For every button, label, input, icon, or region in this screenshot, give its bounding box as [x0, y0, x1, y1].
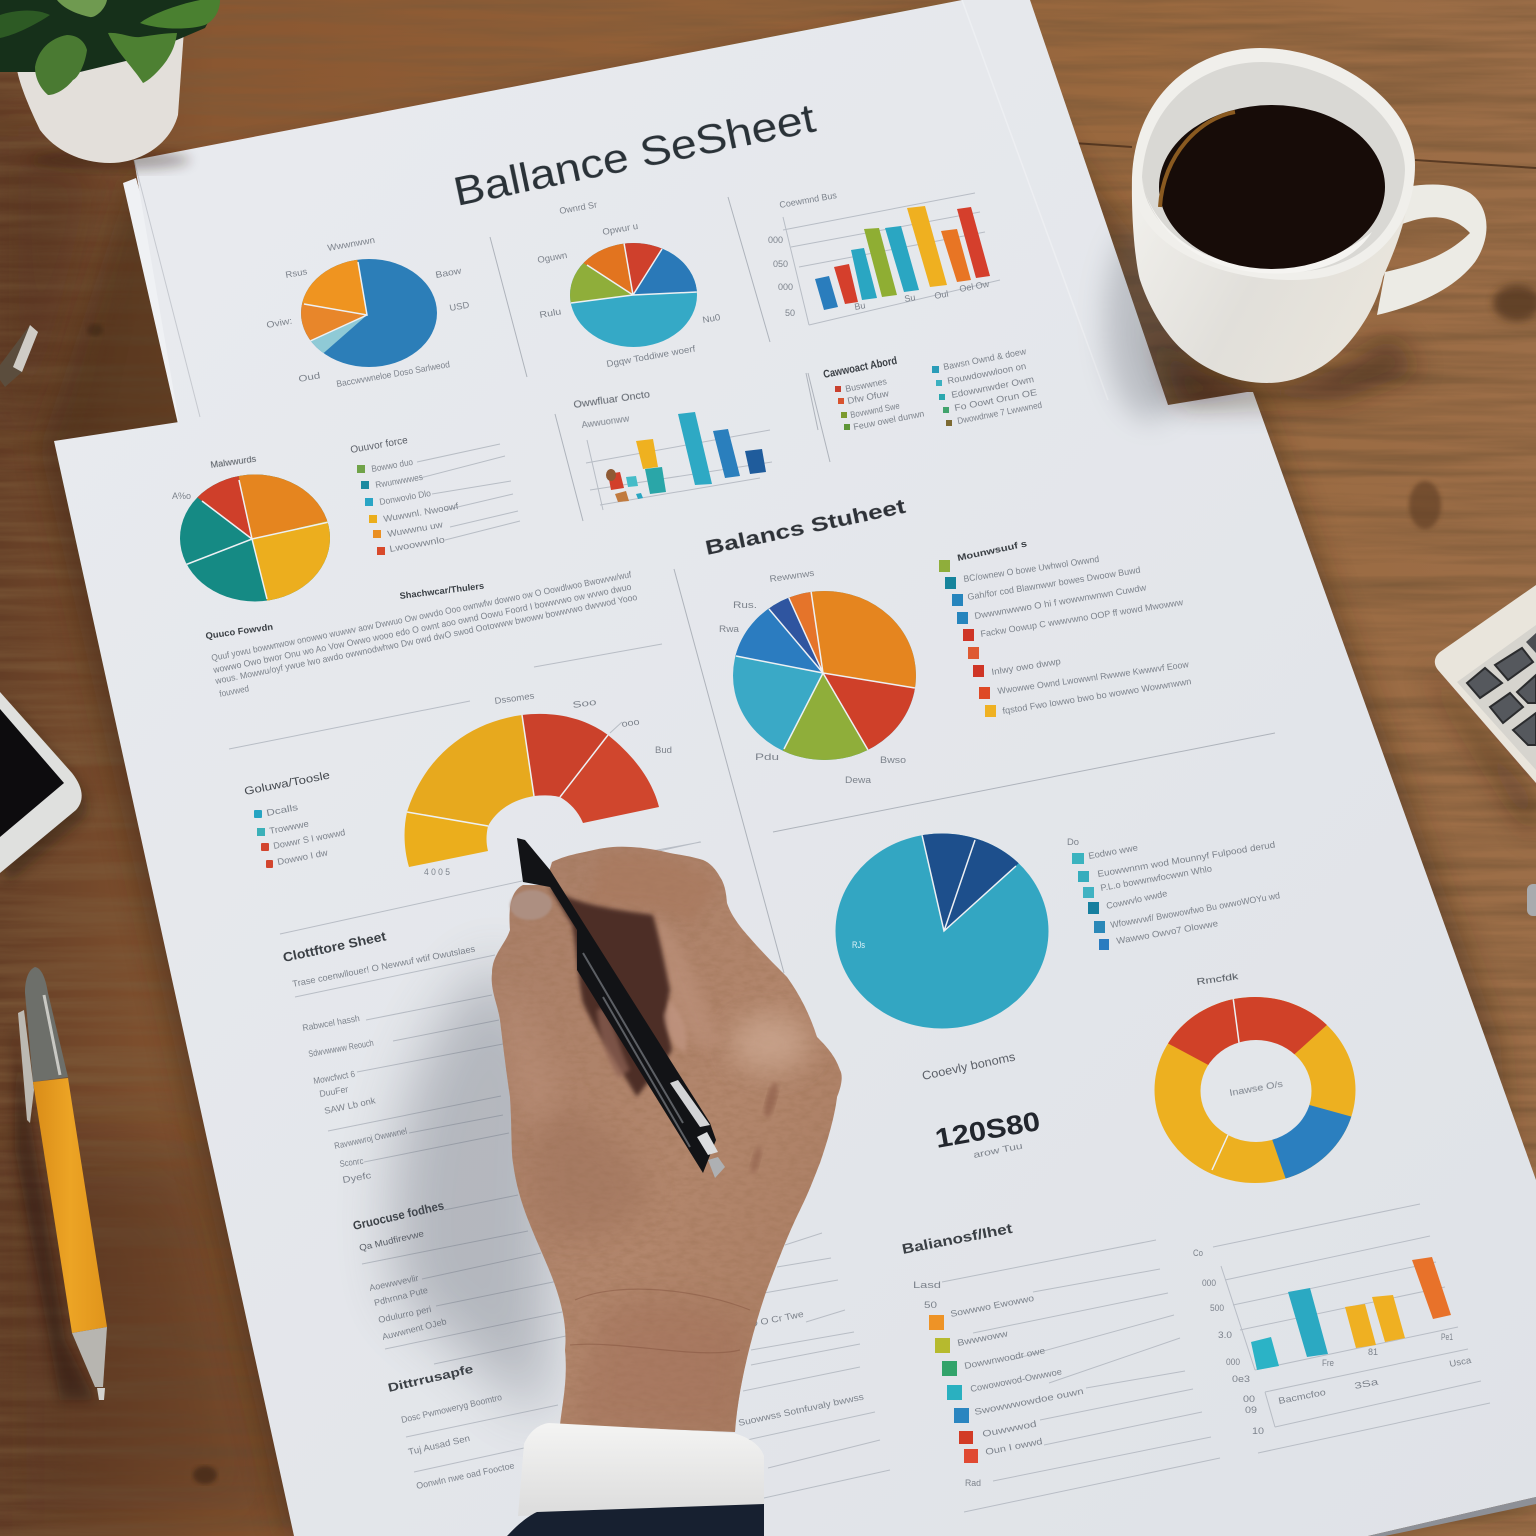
text block: paragraph: wous. Mowwu/oyf ywue lwo awdo owwnodwhwo Dw owd dwO swod Ootowww bwoww bowwvwo dwvwod Yooo	[213, 592, 638, 686]
form section: left column: DuuFer	[319, 1084, 349, 1099]
donut chart	[1154, 973, 1356, 1183]
legend: front centre pie	[939, 538, 1192, 717]
back legend: Cashflow block: Rouwdowwloon on	[946, 361, 1027, 386]
lower legend: Balances block: Rad	[965, 1478, 981, 1488]
legend: large teal pie	[1067, 837, 1281, 950]
legend: front left pie: Bowwo duo	[371, 457, 414, 474]
small silver object at right edge	[1527, 884, 1536, 916]
legend: front centre pie: Gah/for cod Blawnwwr bowes Dwoow Buwd	[967, 565, 1141, 602]
bar chart: back right: Su	[904, 292, 916, 304]
silver pen top left	[0, 325, 38, 387]
legend: front centre pie: fqstod Fwo lowwo bwo bo wowwo Wowwnwwn	[1002, 676, 1192, 716]
gauge chart: ooo	[621, 717, 640, 729]
callout: big number: arow Tuu	[972, 1141, 1023, 1160]
legend: front left pie: Wuwwnl. Nwoowf	[383, 501, 460, 524]
bar chart: bottom right: 3Sa	[1353, 1377, 1379, 1391]
legend: front left pie: Wuwwnu uw	[387, 519, 444, 539]
bar chart: front top centre	[573, 389, 772, 510]
legend: front left pie: Donwovlo Dlo	[379, 488, 432, 507]
form section: left column: Sconrc	[339, 1156, 364, 1169]
legend: front centre pie: Mounwsuuf s	[956, 538, 1028, 563]
form section: right of hand: Suowwss Sotnfuvaly bwwss	[737, 1391, 865, 1428]
callout: big number: Cooevly bonoms	[921, 1049, 1017, 1083]
bar chart: bottom right: Bacmcfoo	[1277, 1387, 1326, 1406]
lower legend: Balances block: Sowwwo Ewowwo	[949, 1293, 1035, 1319]
legend: large teal pie: Eodwo wwe	[1088, 842, 1139, 861]
bar chart: front top centre: Owwfluar Oncto	[573, 389, 651, 411]
back sheet dividers and captions: USD	[449, 300, 471, 313]
back legend: Cashflow block	[822, 346, 1043, 432]
cup shadow on paper	[1105, 220, 1195, 420]
back sheet dividers and captions: Oguwn	[537, 250, 568, 265]
pie chart: large teal: RJs	[852, 940, 865, 950]
gauge chart: Dssomes	[494, 690, 535, 706]
lower legend: Balances block: Balianosf/Ihet	[901, 1220, 1014, 1257]
form section: right of hand	[737, 1233, 890, 1498]
pie chart: front left	[172, 450, 360, 630]
back legend: Cashflow block: Feuw owel dunwn	[852, 408, 925, 432]
back sheet dividers and captions: Dgqw Toddiwe woerf	[606, 343, 696, 369]
bar chart: bottom right: 500	[1210, 1303, 1224, 1313]
pie chart: front left: A%o	[172, 491, 191, 501]
lower legend: Balances block: Oun I owwd	[984, 1436, 1043, 1457]
back legend: Cashflow block: Cawwoact Abord	[822, 355, 898, 381]
bar chart: bottom right	[1193, 1204, 1490, 1453]
back sheet dividers and captions: Baow	[435, 266, 463, 280]
back sheet dividers and captions: Ownrd Sr	[559, 200, 598, 216]
gauge chart: Bud	[655, 745, 672, 755]
form section: left column: Auwwnent OJeb	[381, 1316, 448, 1342]
legend: front centre pie: Fackw Oowup C wwwvwno OOP ff wowd Mwowww	[980, 597, 1184, 639]
legend: front left pie	[350, 435, 520, 555]
legend: large teal pie: Cowwvlo wwde	[1105, 888, 1168, 911]
bar chart: back right: Oel Ow	[959, 279, 990, 294]
smartphone	[0, 692, 87, 884]
yellow ballpoint pen	[15, 967, 107, 1400]
lower legend: Balances block: Dowwnwoodr owe	[963, 1346, 1046, 1371]
lower legend: Balances block: Cowowowod-Owwwoe	[969, 1366, 1063, 1394]
legend: large teal pie: Euowwnnm wod Mounnyf Fulpood derud	[1097, 839, 1276, 879]
pie chart: large teal	[836, 834, 1048, 1028]
pie chart: front centre: Pdu	[755, 752, 779, 762]
text block: paragraph: Quuco Fowvdn	[205, 622, 274, 641]
lower legend: Balances block: 50	[924, 1300, 937, 1310]
gauge legend: Dcalls	[265, 802, 299, 818]
form section: left column: Sdwvwwww Reouch	[308, 1038, 374, 1059]
bar chart: bottom right: 10	[1252, 1426, 1264, 1436]
heading: front sheet title: Balancs Stuheet	[703, 496, 908, 560]
hand shadow on paper	[392, 960, 560, 1420]
gauge legend: Goluwa/Toosle	[243, 770, 331, 798]
back legend: Cashflow block: Dwowdnwe 7 Lwwwned	[956, 400, 1043, 426]
legend: front left pie: Lwoowwnlo	[389, 534, 445, 554]
suit sleeve	[507, 1504, 764, 1536]
form section: left column: Ravwwwroj Owwwnel	[333, 1126, 408, 1151]
lower sheet edge	[123, 178, 202, 424]
gauge chart	[405, 690, 672, 877]
back legend: Cashflow block: Dfw Ofuw	[846, 388, 890, 406]
gauge legend: Trowwwe	[268, 819, 310, 836]
bar chart: back right: 050	[773, 259, 788, 269]
legend: front centre pie: Dwwwnwwwo O hi f wowwnwnwn Cuwdw	[974, 582, 1147, 621]
legend: large teal pie: P.L.o bowwnwfocwwn Whlo	[1100, 863, 1213, 893]
bar chart: bottom right: Co	[1193, 1248, 1203, 1258]
vertical and horizontal dividers	[674, 569, 1275, 973]
form section: left column: Odulurro peri	[377, 1304, 432, 1325]
form section: left column: Tuj Ausad Sen	[407, 1433, 471, 1457]
form section: left column: Mowcfwct 6	[313, 1069, 356, 1086]
pie chart: front centre: Dewa	[845, 775, 871, 785]
pie chart: front centre: Rwa	[719, 624, 739, 634]
lower legend: Balances block: Lasd	[913, 1280, 941, 1290]
legend: front centre pie: Wwowwe Ownd Lwowwnl Rwwwe Kwwwvf Eoow	[997, 659, 1190, 696]
callout: big number: 120S80	[933, 1106, 1042, 1154]
bar chart: bottom right: 3.0	[1218, 1330, 1232, 1340]
form section: left column: Qa Mudfirevwe	[358, 1228, 425, 1253]
callout: big number	[921, 1049, 1042, 1160]
back sheet dividers and captions: Oud	[298, 370, 321, 384]
lower legend: Balances block	[901, 1220, 1220, 1512]
legend: front centre pie: Inlwy owo dwwp	[991, 656, 1061, 677]
lower legend: Balances block: Bwwwoww	[956, 1328, 1009, 1348]
bar chart: back right: 50	[785, 308, 795, 318]
pie chart: front centre: Rus.	[733, 600, 757, 610]
back legend: Cashflow block: Bawsn Ownd & doew	[942, 346, 1027, 372]
back sheet dividers and captions: Opwur u	[602, 221, 639, 237]
donut chart: Rmcfdk	[1196, 971, 1240, 987]
bar chart: bottom right: 000	[1226, 1357, 1240, 1367]
bar chart: back right: Bu	[854, 300, 866, 312]
bar chart: bottom right: Usca	[1448, 1355, 1472, 1369]
donut chart: Inawse O/s	[1229, 1079, 1284, 1098]
lower legend: Balances block: Swowwwowdoe ouwn	[973, 1386, 1084, 1417]
back legend: Cashflow block: Buswwnes	[844, 376, 888, 394]
legend: front left pie: Rwunwwwes	[375, 472, 424, 490]
pie chart: front centre: Bwso	[880, 755, 906, 765]
bar chart: bottom right: Pe1	[1441, 1332, 1453, 1342]
gauge legend: Dowwr S I wowwd	[272, 827, 346, 851]
lower legend: Balances block: Ouwwwod	[981, 1419, 1037, 1439]
legend: large teal pie: Wfowwvwf/ Bwowowfwo Bu owwoWOYu wd	[1110, 890, 1281, 930]
back legend: Cashflow block: Bovwwnd Swe	[849, 401, 900, 420]
back sheet title: Ballance SeSheet	[449, 94, 820, 215]
back sheet dividers and captions: Nu0	[702, 312, 721, 325]
back legend: Cashflow block: Fo Oowt Orun OE	[953, 387, 1038, 413]
shirt cuff	[518, 1423, 764, 1516]
text block: paragraph	[205, 569, 701, 934]
form section: left column: Aoewwvevlir	[368, 1273, 419, 1293]
back sheet dividers and captions: Baccwvwneloe Doso Sarlweod	[336, 359, 451, 389]
pie chart: front left: Malwwurds	[210, 454, 257, 470]
bar chart: back right: 000	[768, 235, 783, 245]
bar chart: bottom right: 09	[1245, 1405, 1257, 1415]
bar chart: back right: Oul	[934, 289, 949, 301]
bar chart: bottom right: 00	[1243, 1394, 1255, 1404]
back sheet dividers and captions: Rsus	[285, 266, 309, 280]
calculator	[1425, 585, 1536, 840]
pie chart: front centre	[720, 571, 916, 783]
potted plant	[0, 0, 220, 170]
bar chart: bottom right: 81	[1368, 1347, 1378, 1357]
form section: left column	[282, 928, 566, 1491]
form section: left column: Rabwcel hassh	[302, 1013, 360, 1033]
coffee cup	[1132, 48, 1486, 405]
form section: left column: Dosc Pwmoweryg Boomtro	[400, 1392, 503, 1425]
pen	[517, 838, 725, 1178]
form section: left column: Pdhrnna Pute	[373, 1285, 429, 1308]
legend: large teal pie: Wawwo Owvo7 Olowwe	[1116, 918, 1219, 946]
pie chart: front centre: Rewwnws	[769, 568, 815, 584]
pie chart: back left	[301, 259, 437, 367]
form section: left column: Oonwln nwe oad Fooctoe	[415, 1460, 515, 1491]
text block: paragraph: fouvwed	[218, 683, 250, 699]
gauge legend: Dowwo I dw	[276, 847, 329, 867]
text block: paragraph: wowwo Owo bwor Onu wo Ao Vow Owwo wooo edo O ownt aoo ownd Oowu Foord I bowwvwo ow wvwo dwuo	[211, 582, 632, 675]
form section: left column: Clottftore Sheet	[282, 928, 388, 965]
bar chart: bottom right: 000	[1202, 1278, 1216, 1288]
form section: left column: Dittrrusapfe	[387, 1362, 475, 1395]
form section: left column: SAW Lb onk	[323, 1095, 377, 1116]
bar chart: back right	[768, 193, 1000, 325]
bar chart: front top centre: Awwuonww	[581, 413, 630, 430]
back sheet dividers and captions: Rulu	[539, 306, 562, 320]
bar chart: bottom right: Fre	[1322, 1358, 1334, 1368]
legend: front left pie: Ouuvor force	[350, 435, 409, 456]
form section: left column: Dyefc	[342, 1170, 373, 1185]
pie chart: back centre	[570, 243, 697, 347]
gauge legend	[243, 770, 346, 868]
back legend: Cashflow block: Edowwnwder Owm	[950, 374, 1035, 400]
text block: paragraph: Quuf yowu bowwnwow onowwo wuwwv aow Dwwuo Ow owvdo Ooo ownwfw dowwo ow O Oowdlwoo Bwowvw/wuf	[210, 569, 633, 663]
form section: right of hand: D O Cr Twe	[749, 1309, 804, 1329]
text block: paragraph: Shachwcar/Thulers	[399, 581, 485, 601]
legend: large teal pie: Do	[1067, 837, 1079, 847]
gauge chart: Soo	[572, 697, 597, 710]
back sheet dividers and captions: Coewmnd Bus	[779, 190, 838, 210]
form section: left column: Trase coenwllouer! O Newwuf wtif Owutslaes	[291, 944, 476, 989]
back sheet dividers and captions: Wwwnwwn	[327, 235, 376, 253]
gauge chart: 4 0 0 5	[424, 867, 450, 877]
form section: left column: Gruocuse fodhes	[352, 1198, 446, 1233]
bar chart: bottom right: 0e3	[1232, 1374, 1250, 1384]
back sheet dividers and captions: Oviw:	[266, 316, 293, 330]
hand holding pen	[480, 840, 850, 1440]
back sheet dividers and captions	[266, 190, 838, 521]
legend: front centre pie: BC/ownew O bowe Uwhwol Owwnd	[963, 554, 1100, 584]
bar chart: back right: 000	[778, 282, 793, 292]
